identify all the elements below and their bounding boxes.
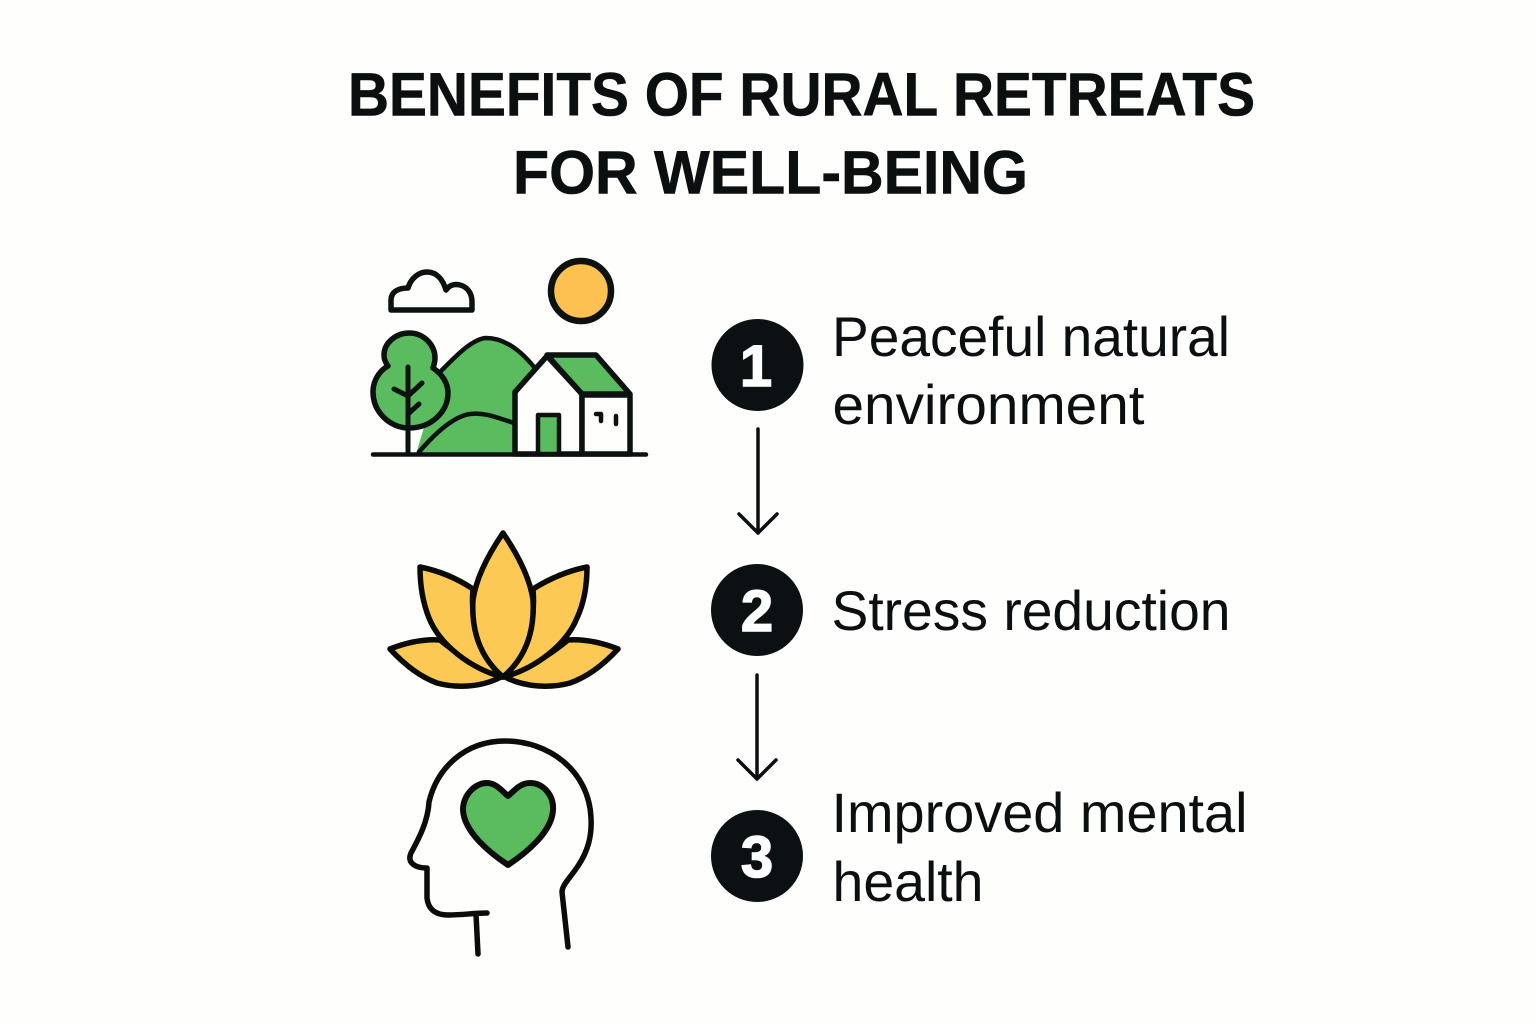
lower left petal <box>390 640 501 686</box>
step 1 badge <box>712 319 804 411</box>
house windows <box>596 414 616 424</box>
right petal <box>504 567 587 677</box>
house door <box>538 415 559 454</box>
label: improved mental health: Improved mental <box>832 781 1248 844</box>
label: peaceful natural environment: environment <box>832 373 1145 436</box>
label: improved mental health <box>832 781 1248 913</box>
label: peaceful natural environment: Peaceful natural <box>832 305 1230 368</box>
left petal <box>420 567 502 677</box>
icon: hill <box>416 338 535 454</box>
icon: cloud <box>391 272 472 310</box>
label: peaceful natural environment <box>832 305 1230 436</box>
icon: head with heart <box>410 741 591 954</box>
title: BENEFITS OF RURAL RETREATS <box>348 60 1255 128</box>
tree trunk <box>394 367 422 453</box>
title <box>348 60 1255 206</box>
icon: lotus <box>390 533 618 686</box>
lower right petal <box>505 640 618 686</box>
label: improved mental health: health <box>832 850 984 913</box>
center petal <box>473 533 533 677</box>
icon: heart <box>463 783 553 865</box>
head outline <box>410 741 591 947</box>
step 1 badge: 1 <box>740 334 772 399</box>
icon: rural landscape <box>373 261 646 454</box>
label: stress reduction: Stress reduction <box>832 579 1230 642</box>
arrow 1 to 2 <box>739 429 777 533</box>
ground line <box>373 452 646 457</box>
hill contour <box>419 414 514 452</box>
icon: house <box>515 356 582 454</box>
house side wall <box>582 395 630 454</box>
step 3 badge <box>711 810 803 902</box>
step 2 badge <box>711 564 803 656</box>
step 3 badge: 3 <box>741 825 773 890</box>
hill outline <box>441 338 534 371</box>
arrow 2 to 3 <box>738 675 776 779</box>
step 2 badge: 2 <box>741 579 773 644</box>
title: FOR WELL-BEING <box>513 138 1028 206</box>
house roof <box>547 355 630 394</box>
neck line <box>476 914 478 954</box>
icon: sun <box>551 261 611 321</box>
icon: tree <box>373 333 448 428</box>
